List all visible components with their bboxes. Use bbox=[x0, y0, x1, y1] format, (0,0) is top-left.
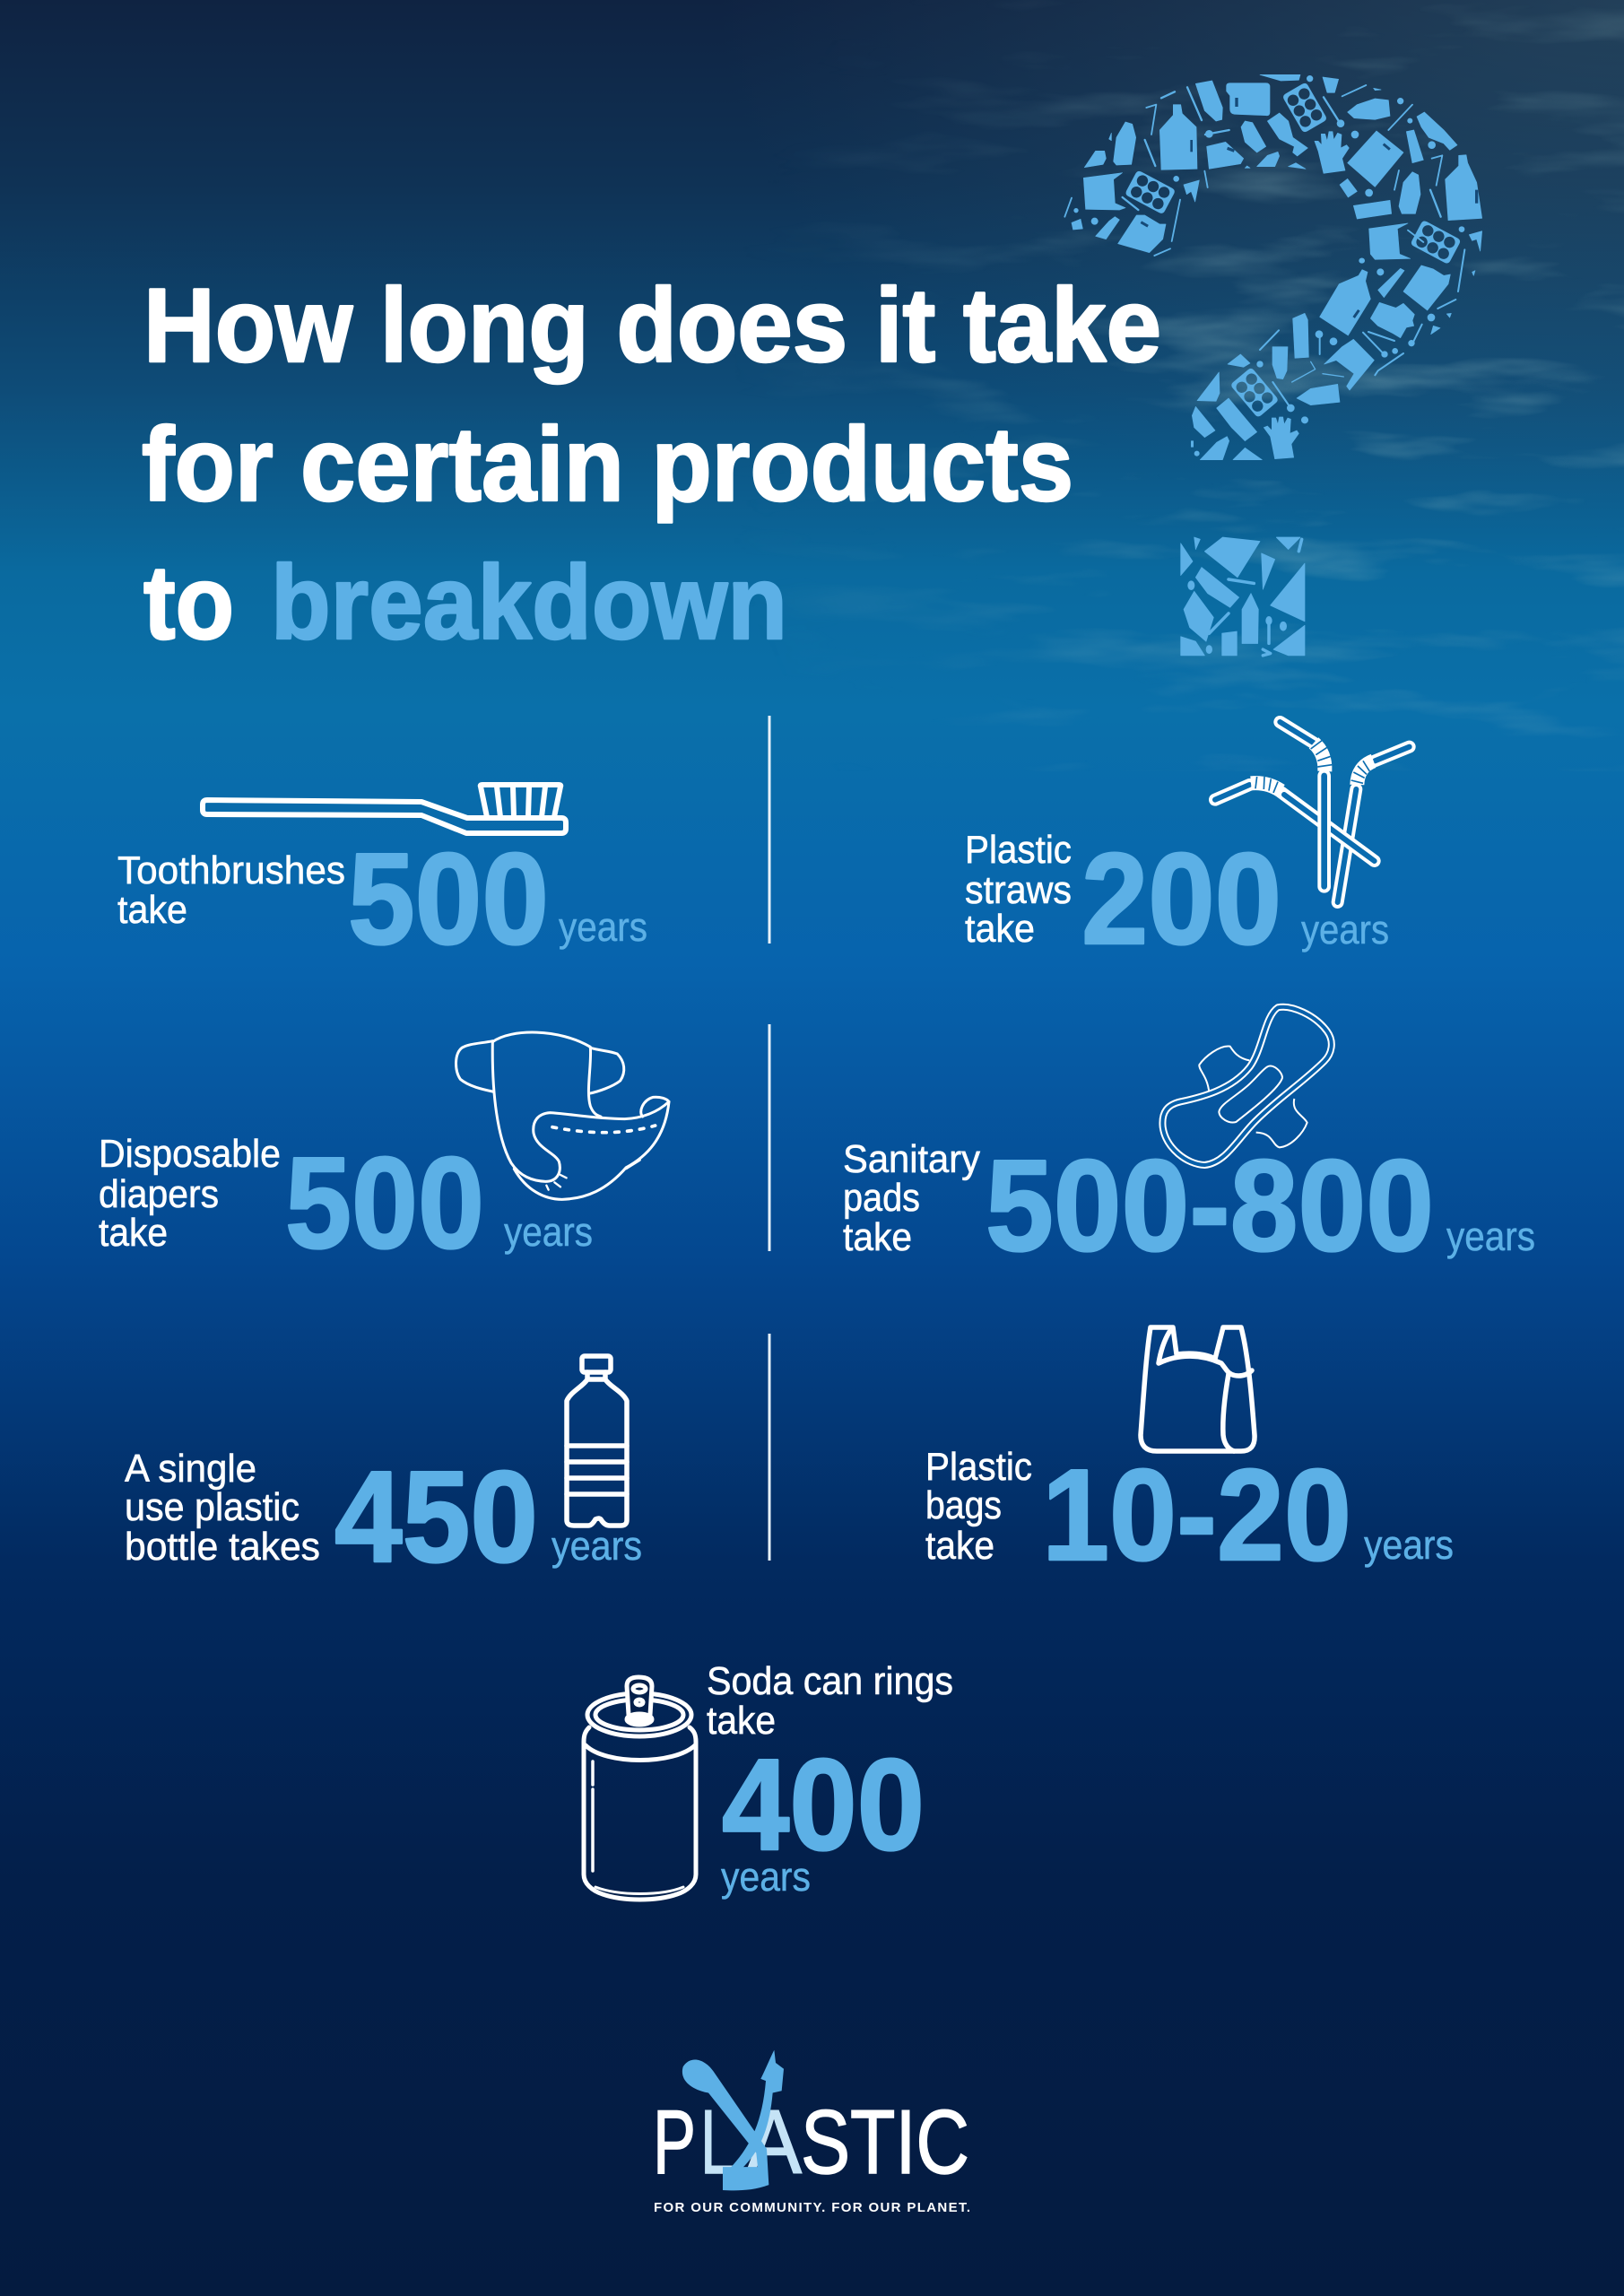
panel: single use plastic bottle: use plastic bbox=[125, 1485, 300, 1529]
logo: No Plastic: L bbox=[700, 2092, 734, 2193]
title: to bbox=[143, 544, 234, 661]
panel: soda can rings: Soda can rings bbox=[707, 1659, 953, 1703]
panel: soda can rings bbox=[584, 1659, 953, 1900]
title: for certain products bbox=[142, 405, 1073, 523]
panel: toothbrushes: years bbox=[559, 904, 647, 950]
panel: soda can rings: 400 bbox=[722, 1732, 925, 1877]
panel: sanitary pads: years bbox=[1446, 1213, 1535, 1259]
panel: single use plastic bottle: 450 bbox=[334, 1444, 538, 1589]
panel: single use plastic bottle: bottle takes bbox=[125, 1525, 320, 1569]
panel: plastic straws: Plastic bbox=[965, 828, 1072, 872]
panel: single use plastic bottle: years bbox=[551, 1523, 642, 1569]
panel: plastic bags: years bbox=[1364, 1522, 1454, 1568]
question mark: lower curve items bbox=[1191, 249, 1475, 460]
panel: disposable diapers bbox=[99, 1032, 669, 1275]
question mark: dot bbox=[1181, 537, 1305, 656]
panel: plastic bags: Plastic bbox=[925, 1445, 1032, 1489]
icon: bottle bbox=[567, 1356, 627, 1526]
logo: No Plastic: P bbox=[653, 2092, 696, 2193]
panel: sanitary pads: Sanitary bbox=[843, 1137, 980, 1181]
panel: plastic straws: years bbox=[1301, 907, 1389, 952]
panel: plastic bags: take bbox=[925, 1524, 994, 1568]
panel: sanitary pads: 500-800 bbox=[986, 1133, 1434, 1278]
panel: toothbrushes: Toothbrushes bbox=[117, 848, 345, 892]
question mark: top arc items bbox=[1064, 74, 1482, 265]
title: How long does it take bbox=[143, 266, 1161, 384]
logo: No Plastic: STIC bbox=[801, 2092, 969, 2193]
panel: plastic straws: take bbox=[965, 907, 1035, 951]
panel: sanitary pads bbox=[843, 1007, 1535, 1278]
icon: plastic bag bbox=[1141, 1327, 1255, 1451]
icon: toothbrush bbox=[203, 785, 566, 833]
icon: spoon and fork cross bbox=[682, 2050, 784, 2190]
title: breakdown bbox=[271, 544, 787, 661]
icon: sanitary pad bbox=[1162, 1007, 1332, 1165]
divider lines bbox=[768, 716, 771, 1561]
icon: diaper bbox=[456, 1032, 669, 1199]
panel: soda can rings: take bbox=[707, 1699, 776, 1743]
panel: plastic straws: 200 bbox=[1081, 826, 1281, 971]
panel: toothbrushes: 500 bbox=[348, 826, 549, 971]
panel: single use plastic bottle: A single bbox=[125, 1447, 256, 1491]
panel: soda can rings: years bbox=[721, 1854, 811, 1900]
title bbox=[142, 266, 1161, 661]
panel: plastic bags: 10-20 bbox=[1042, 1442, 1351, 1587]
icon: straws bbox=[1215, 722, 1410, 902]
panel: sanitary pads: pads bbox=[843, 1176, 920, 1220]
panel: toothbrushes bbox=[117, 785, 647, 971]
panel: disposable diapers: take bbox=[99, 1211, 168, 1255]
panel: plastic bags: bags bbox=[925, 1483, 1002, 1527]
icon: question mark made of plastic items bbox=[1064, 74, 1482, 656]
icon: soda can bbox=[584, 1677, 696, 1900]
logo: No Plastic: A bbox=[746, 2092, 803, 2193]
logo: No Plastic: FOR OUR COMMUNITY. FOR OUR PLANET. bbox=[654, 2200, 970, 2215]
panel: plastic bags bbox=[925, 1327, 1454, 1587]
panel: disposable diapers: 500 bbox=[285, 1130, 484, 1275]
panel: single use plastic bottle bbox=[125, 1356, 642, 1589]
panel: disposable diapers: diapers bbox=[99, 1172, 219, 1216]
logo: No Plastic bbox=[653, 2050, 970, 2215]
panel: disposable diapers: Disposable bbox=[99, 1132, 281, 1176]
panel: disposable diapers: years bbox=[504, 1209, 593, 1255]
panel: plastic straws: straws bbox=[965, 868, 1072, 912]
panel: plastic straws bbox=[965, 722, 1410, 971]
panel: toothbrushes: take bbox=[117, 888, 187, 932]
panel: sanitary pads: take bbox=[843, 1215, 912, 1259]
